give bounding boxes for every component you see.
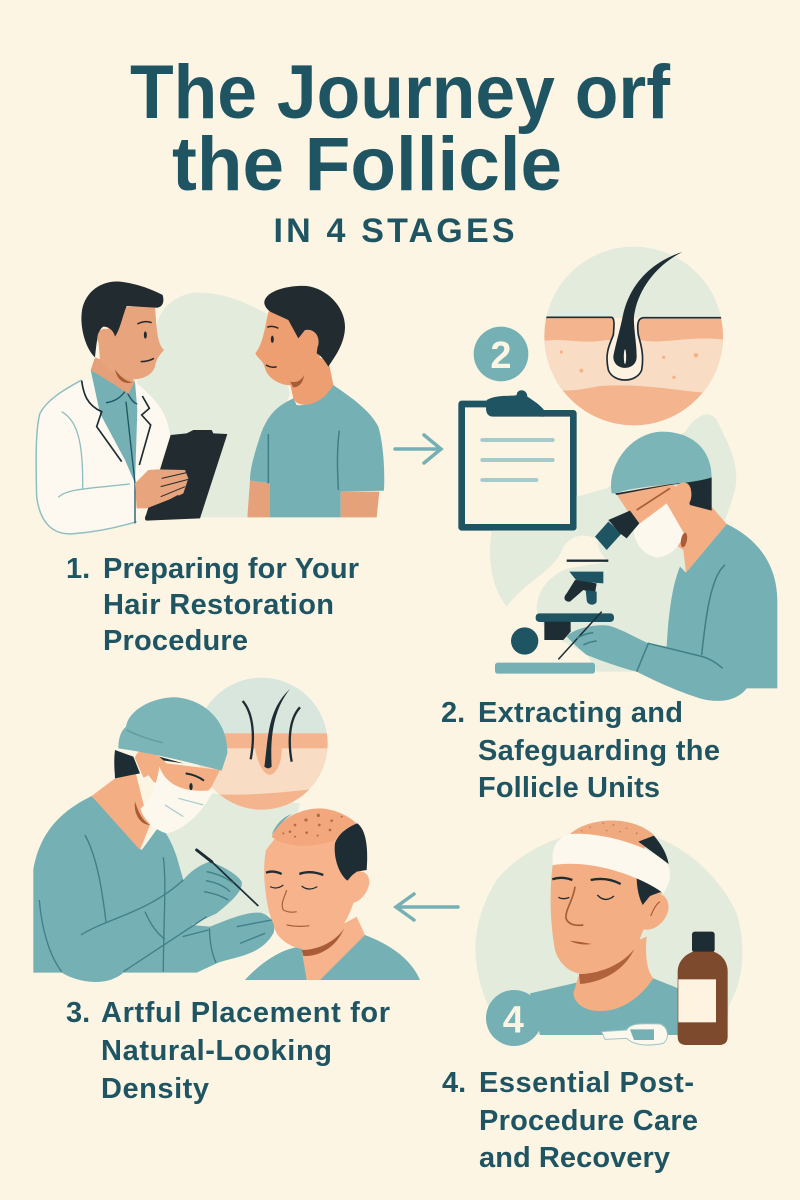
icon: doctor	[36, 282, 227, 534]
subtitle: IN 4 STAGES	[274, 212, 514, 250]
heading: stage 1: 1.	[66, 553, 90, 585]
heading: stage 1: Preparing for Your	[103, 553, 359, 585]
heading: stage 3: 3.	[66, 997, 90, 1029]
title: The Journey orf	[130, 50, 671, 135]
heading: stage 2	[441, 697, 720, 804]
arrow: stage 1 to 2	[395, 435, 441, 463]
background circle	[475, 828, 742, 1035]
background blob	[490, 414, 736, 672]
heading: stage 2: Extracting and	[478, 697, 683, 729]
heading: stage 2: 2.	[441, 697, 465, 729]
icon: follicle close-up	[540, 247, 730, 427]
heading: stage 4: 4.	[442, 1067, 466, 1099]
badge: number 2	[474, 327, 528, 381]
heading: stage 1: Hair Restoration	[103, 589, 334, 621]
badge: number 2: 2	[490, 335, 512, 377]
background blob	[163, 793, 300, 932]
icon: patient	[247, 286, 384, 517]
arrow: stage 4 to 3	[396, 894, 458, 920]
heading: stage 4	[442, 1067, 698, 1174]
panel: stage 4 illustration	[475, 820, 742, 1046]
heading: stage 3: Artful Placement for	[101, 997, 390, 1029]
heading: stage 1: Procedure	[103, 625, 248, 657]
icon: follicle close-up	[193, 678, 330, 813]
heading: stage 4: and Recovery	[479, 1142, 670, 1174]
icon: bottle	[678, 932, 728, 1045]
icon: ampoule	[602, 1024, 667, 1045]
heading: stage 3	[66, 997, 390, 1105]
heading: stage 3: Natural-Looking	[101, 1035, 332, 1067]
background blob	[137, 293, 290, 517]
badge: number 4: 4	[503, 999, 524, 1041]
badge: number 4	[486, 990, 542, 1046]
heading: stage 4: Essential Post-	[479, 1067, 694, 1099]
icon: clipboard	[145, 430, 227, 521]
icon: surgeon with microscope	[495, 432, 777, 701]
panel: stage 1 illustration	[36, 282, 384, 534]
panel: stage 2 illustration	[462, 247, 777, 701]
panel: stage 3 illustration	[33, 678, 420, 982]
heading: stage 4: Procedure Care	[479, 1105, 698, 1137]
title: the Follicle	[172, 122, 562, 207]
icon: patient	[245, 808, 420, 980]
heading: stage 3: Density	[101, 1073, 209, 1105]
icon: patient with bandage	[530, 820, 678, 1045]
icon: surgeon	[33, 697, 274, 982]
heading: stage 2: Follicle Units	[478, 772, 660, 804]
icon: clipboard	[462, 390, 573, 527]
title	[130, 50, 671, 207]
heading: stage 1	[66, 553, 359, 657]
heading: stage 2: Safeguarding the	[478, 735, 720, 767]
